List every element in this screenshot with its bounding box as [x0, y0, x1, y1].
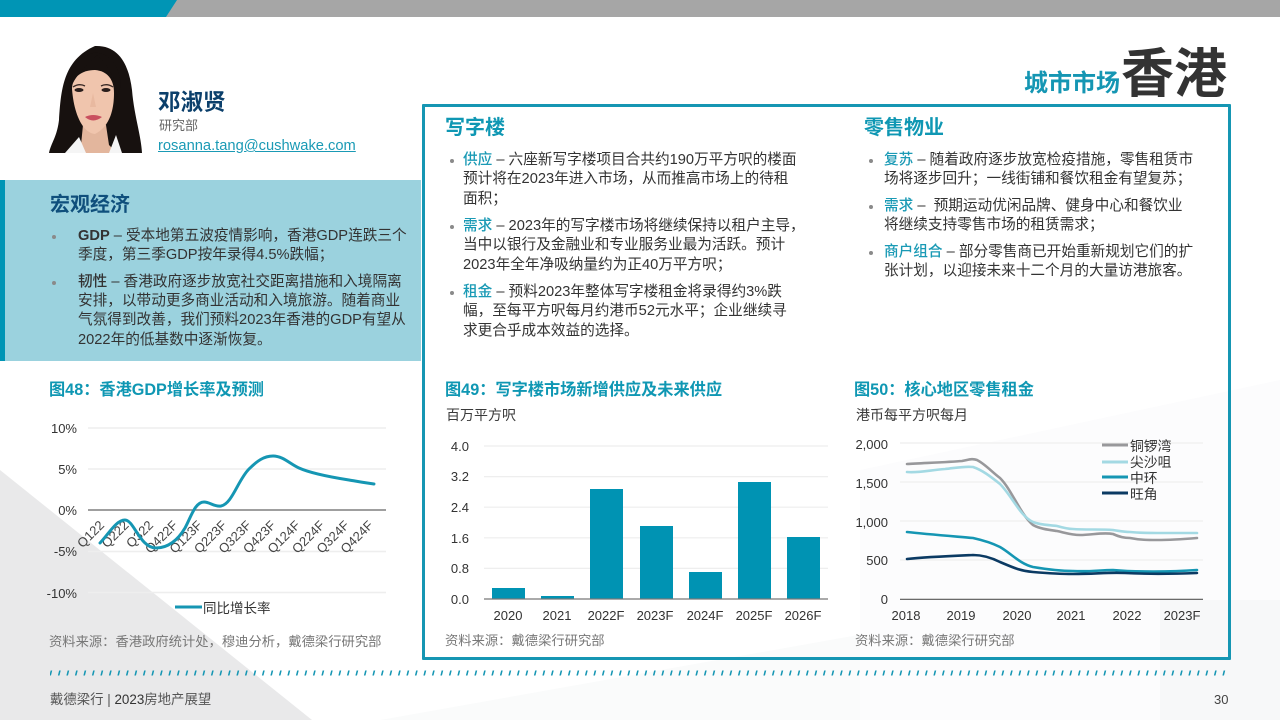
office bullet: rent: 幅，至每平方呎每月约港币52元水平；企业继续寻 [463, 303, 787, 319]
retail bullet: tenant mix [869, 243, 1193, 279]
chart: office supply bars: 2021 [543, 608, 571, 623]
chart: office supply bars: 3.2 [451, 469, 469, 484]
chart: office supply bars: 0.8 [451, 561, 469, 576]
office bullet: supply: 供应 – 六座新写字楼项目合共约190万平方呎的楼面 [463, 152, 797, 168]
portrait photo [49, 46, 142, 153]
chart: GDP growth line: Q323F [215, 517, 254, 556]
chart: GDP growth line: -10% [47, 586, 77, 601]
chart: office supply bars: 2020 [494, 608, 522, 623]
author department: 研究部 [159, 118, 198, 133]
chart: GDP growth line: Q124F [264, 517, 303, 556]
figure 48 title: 图48：香港GDP增长率及预测 [49, 381, 264, 399]
office bullet: rent: 求更合乎成本效益的选择。 [463, 323, 639, 339]
chart: GDP growth line: 10% [51, 421, 77, 436]
figure 50 source: 资料来源：戴德梁行研究部 [855, 633, 1015, 648]
figure 48 source: 资料来源：香港政府统计处，穆迪分析，戴德梁行研究部 [49, 634, 381, 649]
retail bullet: demand [869, 197, 1183, 233]
chart: retail rents lines: 2020 [1003, 608, 1031, 623]
top banner [0, 0, 1280, 17]
page title [1024, 45, 1227, 104]
macro bullet: GDP: 季度，第三季GDP按年录得4.5%跌幅； [78, 247, 333, 263]
page number: 30 [1214, 692, 1228, 707]
macro bullet: GDP: GDP – 受本地第五波疫情影响，香港GDP连跌三个 [78, 228, 407, 244]
retail bullet: tenant mix: 商户组合 – 部分零售商已开始重新规划它们的扩 [884, 244, 1193, 260]
chart: GDP growth line: Q322 [123, 518, 156, 551]
retail bullet: demand: 将继续支持零售市场的租赁需求； [884, 217, 1104, 233]
chart: GDP growth line: Q224F [289, 517, 328, 556]
retail bullet: tenant mix: 张计划，以迎接未来十二个月的大量访港旅客。 [884, 263, 1191, 279]
retail bullet: demand: 需求 – 预期运动优闲品牌、健身中心和餐饮业 [884, 198, 1183, 214]
figure 50 unit: 港币每平方呎每月 [856, 407, 968, 423]
chart: retail rents lines: 尖沙咀 [1130, 455, 1172, 470]
chart: office supply bars: 2026F [785, 608, 821, 623]
chart: retail rents lines: 2019 [947, 608, 975, 623]
chart: GDP growth line: -5% [54, 544, 77, 559]
chart: GDP growth line: Q222 [99, 518, 132, 551]
author name: 邓淑贤 [158, 90, 226, 115]
macro bullet: resilience [52, 273, 406, 348]
chart: retail rents lines: 2,000 [855, 437, 888, 452]
chart: GDP growth line: Q422F [142, 517, 181, 556]
panel accent strip [0, 180, 5, 361]
chart: office supply bars: 2023F [637, 608, 673, 623]
title label: city markets: 城市市场 [1024, 70, 1120, 97]
chart: GDP growth line: 同比增长率 [203, 600, 270, 616]
office bullet: demand: 当中以银行及金融业和专业服务业最为活跃。预计 [463, 237, 785, 253]
office bullet: demand: 2023年全年净吸纳量约为正40万平方呎； [463, 257, 731, 273]
macro bullet: resilience: 韧性 – 香港政府逐步放宽社交距离措施和入境隔离 [78, 274, 402, 290]
office bullet: supply: 预计将在2023年进入市场，从而推高市场上的待租 [463, 171, 788, 187]
panel: macro economy [0, 180, 421, 361]
chart: office supply bars: 4.0 [451, 439, 469, 454]
macro heading: 宏观经济 [50, 194, 130, 216]
panel: main frame [422, 104, 1231, 660]
author email: rosanna.tang@cushwake.com [158, 138, 356, 154]
chart: retail rents lines: 1,500 [855, 476, 888, 491]
chart: office supply bars: 2.4 [451, 500, 469, 515]
chart: office supply bars: 0.0 [451, 592, 469, 607]
office bullet: demand [450, 217, 805, 273]
office bullet: demand: 需求 – 2023年的写字楼市场将继续保持以租户主导， [463, 218, 805, 234]
retail heading: 零售物业 [864, 117, 944, 139]
chart: GDP growth line: Q424F [337, 517, 376, 556]
macro bullet: resilience: 2022年的低基数中逐渐恢复。 [78, 332, 272, 348]
chart: retail rents lines: 2023F [1164, 608, 1200, 623]
retail bullet: recovery [869, 151, 1193, 187]
chart: GDP growth line: Q324F [313, 517, 352, 556]
chart: retail rents lines: 0 [881, 592, 888, 607]
chart: GDP growth line: Q122 [74, 518, 107, 551]
office bullet: supply: 面积； [463, 191, 507, 207]
chart: retail rents lines: 中环 [1130, 471, 1158, 486]
chart: retail rents lines: 2018 [892, 608, 920, 623]
figure 49 source: 资料来源：戴德梁行研究部 [445, 633, 605, 648]
figure 49 unit: 百万平方呎 [446, 407, 516, 423]
chart: office supply bars: 2025F [736, 608, 772, 623]
chart: retail rents lines: 2021 [1057, 608, 1085, 623]
chart: retail rents lines: 500 [866, 553, 888, 568]
title: Hong Kong: 香港 [1121, 45, 1227, 104]
office bullet: rent: 租金 – 预料2023年整体写字楼租金将录得约3%跌 [463, 284, 782, 300]
chart: GDP growth line: 5% [58, 462, 77, 477]
chart: GDP growth line: Q223F [191, 517, 230, 556]
macro bullet: resilience: 气氛得到改善，我们预料2023年香港的GDP有望从 [78, 312, 406, 328]
chart: GDP growth line: Q423F [240, 517, 279, 556]
office heading: 写字楼 [445, 117, 505, 139]
chart: office supply bars: 2022F [588, 608, 624, 623]
figure 49 title: 图49：写字楼市场新增供应及未来供应 [445, 381, 722, 399]
dashed divider [50, 670, 1226, 676]
chart: retail rents lines: 旺角 [1130, 487, 1158, 502]
chart: retail rents lines: 2022 [1113, 608, 1141, 623]
macro bullet: resilience: 安排，以带动更多商业活动和入境旅游。随着商业 [78, 293, 400, 309]
chart: office supply bars: 2024F [687, 608, 723, 623]
chart: retail rents lines: 铜锣湾 [1130, 438, 1172, 454]
figure 50 title: 图50：核心地区零售租金 [854, 381, 1034, 399]
chart: GDP growth line: 0% [58, 503, 77, 518]
office bullet: rent [450, 283, 787, 339]
macro bullet: GDP [52, 227, 407, 263]
chart: retail rents lines: 1,000 [855, 515, 888, 530]
chart: retail rents lines [855, 437, 1203, 623]
retail bullet: recovery: 复苏 – 随着政府逐步放宽检疫措施，零售租赁市 [884, 152, 1193, 168]
chart: office supply bars [451, 439, 828, 623]
chart: GDP growth line: Q123F [166, 517, 205, 556]
chart: office supply bars: 1.6 [451, 531, 469, 546]
office bullet: supply [450, 151, 797, 207]
footer label: 戴德梁行 | 2023房地产展望 [50, 692, 211, 707]
chart: GDP growth line [47, 421, 386, 616]
retail bullet: recovery: 场将逐步回升；一线街铺和餐饮租金有望复苏； [884, 171, 1191, 187]
